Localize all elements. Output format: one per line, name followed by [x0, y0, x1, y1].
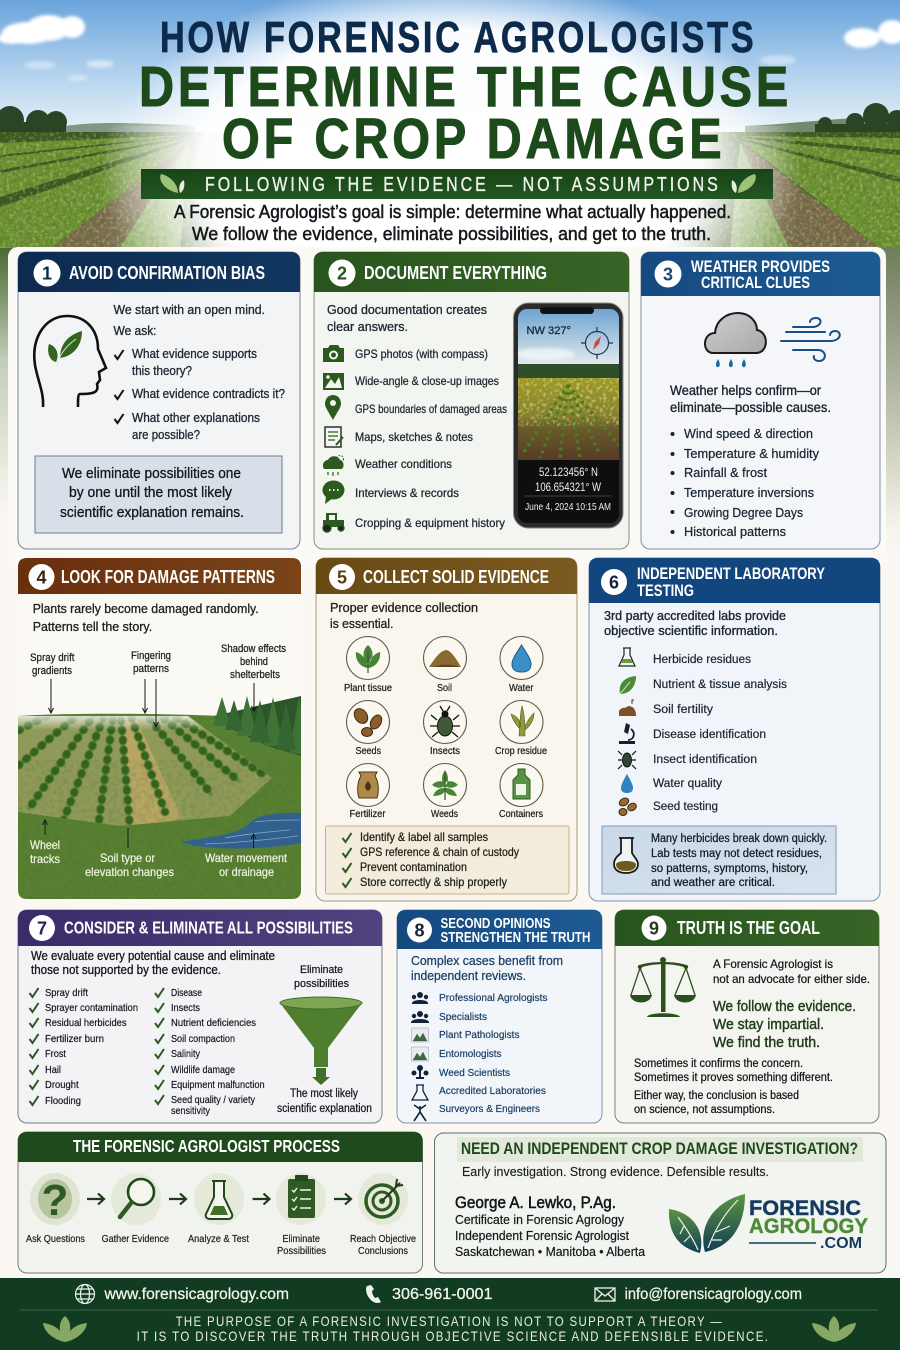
list: weather factors: Rainfall & frost — [684, 465, 767, 480]
text: we evaluate — [31, 949, 275, 977]
checklist: possibilities column 1: Residual herbicides — [45, 1017, 126, 1029]
number badge 1: 1 — [42, 264, 52, 284]
item: GPS photos — [323, 345, 488, 362]
item: herbicide residues: Herbicide residues — [653, 654, 751, 666]
list: reviewers: Weed Scientists — [439, 1067, 510, 1079]
contact details: Certificate in Forensic Agrology — [455, 1213, 625, 1227]
item: GPS boundaries: GPS boundaries of damaged areas — [355, 402, 507, 416]
checklist: possibilities column 2: Equipment malfunction — [171, 1079, 265, 1091]
item: wide-angle images — [323, 373, 499, 390]
text: follow the evidence: We follow the evidence. — [713, 999, 856, 1015]
icon: weeds — [424, 764, 466, 820]
panel: call to action and contact — [434, 1133, 886, 1273]
contact details: Saskatchewan • Manitoba • Alberta — [455, 1245, 645, 1259]
checklist: possibilities column 2: Wildlife damage — [171, 1064, 235, 1076]
icon: wind — [781, 318, 840, 361]
panel 9: truth is the goal — [615, 910, 879, 1123]
text: open mind questions: What evidence supports — [132, 346, 257, 361]
icon: flask — [614, 838, 638, 873]
contact details: Independent Forensic Agrologist — [455, 1229, 629, 1243]
checklist: sample handling: Store correctly & ship properly — [360, 875, 507, 889]
item: interviews: Interviews & records — [355, 486, 459, 500]
panel 4: look for damage patterns — [0, 558, 309, 899]
list: reviewers: Surveyors & Engineers — [439, 1103, 540, 1115]
icon: specialists — [411, 1011, 429, 1023]
label: spray drift gradients: gradients — [32, 665, 72, 677]
label: spray drift gradients — [30, 652, 74, 677]
text: weather helps — [670, 383, 831, 415]
heading: AVOID CONFIRMATION BIAS — [69, 263, 265, 283]
heading: DOCUMENT EVERYTHING — [364, 263, 547, 283]
callout: herbicides break down: and weather are critical. — [651, 877, 775, 889]
checklist: possibilities column 1: Drought — [45, 1079, 79, 1091]
labels: bottom of field: tracks — [30, 852, 60, 866]
item: water quality: Water quality — [653, 778, 722, 790]
funnel diagram: possibilities — [294, 978, 349, 990]
icon: insects — [424, 700, 466, 757]
arrow — [253, 1194, 270, 1204]
icon: head with leaf — [34, 316, 106, 407]
checklist: possibilities column 1: Sprayer contamination — [45, 1002, 138, 1014]
text: conclusion: Sometimes it confirms the concern. — [634, 1058, 803, 1070]
text: we evaluate: those not supported by the evidence. — [31, 963, 221, 977]
panel 3: weather provides critical clues — [641, 252, 880, 549]
number badge 5: 5 — [337, 568, 347, 588]
closing statement — [137, 1313, 768, 1344]
text: not an advocate — [713, 957, 870, 986]
checklist: possibilities column 1: Spray drift — [45, 987, 88, 999]
item: disease identification — [619, 723, 766, 744]
number badge 9: 9 — [649, 918, 659, 938]
labels: bottom of field — [30, 838, 288, 879]
text: complex cases — [411, 954, 563, 983]
number badge 3 — [654, 260, 682, 288]
heading: INDEPENDENT LABORATORY — [637, 565, 825, 583]
callout: herbicides break down: so patterns, symptoms, history, — [651, 863, 808, 875]
checklist: possibilities column 1 — [30, 987, 138, 1107]
arrows: bottom callouts — [42, 820, 256, 848]
text: plants rarely — [33, 601, 259, 634]
list: reviewers: Professional Agrologists — [439, 992, 548, 1004]
panel 6: independent laboratory testing — [589, 558, 880, 901]
label: fingering patterns: Fingering — [131, 650, 171, 662]
logo: forensic agrology — [669, 1194, 868, 1253]
step: ask questions: Ask Questions — [26, 1233, 85, 1245]
heading: CONSIDER & ELIMINATE ALL POSSIBILITIES — [64, 918, 353, 938]
text: follow the evidence: We find the truth. — [713, 1035, 820, 1051]
item: seed testing: Seed testing — [653, 801, 718, 813]
heading: CRITICAL CLUES — [701, 274, 810, 292]
number badge 8 — [407, 918, 432, 942]
heading: SECOND OPINIONS — [440, 916, 551, 932]
text: open mind questions: What other explanations — [132, 410, 260, 425]
panel 7: consider and eliminate all possibilities — [18, 910, 382, 1123]
number badge 4: 4 — [36, 568, 47, 588]
text: follow the evidence — [713, 999, 856, 1051]
item: seed testing — [618, 796, 718, 816]
number badge 6: 6 — [609, 572, 619, 592]
heading: LOOK FOR DAMAGE PATTERNS — [61, 567, 275, 587]
GPS coordinates: 52.123456° N — [539, 467, 598, 479]
labels: bottom of field: Water movement — [205, 851, 288, 865]
funnel diagram: The most likely — [290, 1088, 358, 1100]
text: weather helps: Weather helps confirm—or — [670, 383, 821, 398]
checklist: possibilities column 1: Flooding — [45, 1095, 81, 1107]
GPS coordinates — [524, 467, 612, 513]
labels: bottom of field: elevation changes — [85, 865, 174, 879]
callout: eliminate possibilities: We eliminate possibilities one — [62, 466, 241, 482]
list: reviewers: Specialists — [439, 1011, 487, 1023]
step: gather evidence: Gather Evidence — [102, 1233, 169, 1245]
list: reviewers: Entomologists — [439, 1048, 502, 1060]
logo: forensic agrology: FORENSIC — [749, 1197, 861, 1220]
number badge 5 — [329, 564, 355, 590]
text: complex cases: independent reviews. — [411, 969, 526, 983]
icon: fertilizer: Fertilizer — [350, 808, 386, 820]
icon: compass — [581, 327, 613, 359]
list: weather factors: Temperature & humidity — [684, 446, 819, 461]
heading: STRENGTHEN THE TRUTH — [440, 930, 590, 946]
text: follow the evidence: We stay impartial. — [713, 1017, 824, 1033]
step: reach objective conclusions — [350, 1173, 416, 1257]
item: wide-angle images: Wide-angle & close-up images — [355, 374, 499, 388]
funnel diagram — [277, 964, 372, 1115]
contact details: George A. Lewko, P.Ag. — [455, 1193, 616, 1212]
heading: TESTING — [637, 582, 694, 600]
list: weather factors — [670, 426, 819, 539]
step: reach objective conclusions: Conclusions — [358, 1245, 408, 1257]
number badge 3: 3 — [663, 264, 673, 284]
label: spray drift gradients: Spray drift — [30, 652, 74, 664]
icon: soil — [424, 636, 466, 694]
icon: rain cloud — [705, 313, 766, 367]
text: weather helps: eliminate—possible causes. — [670, 400, 831, 415]
icon: weed scientists — [412, 1065, 428, 1079]
text: conclusion — [634, 1058, 833, 1116]
illustration: phone with GPS photo — [514, 303, 623, 528]
checklist: possibilities column 2: Nutrient deficiencies — [171, 1017, 256, 1029]
checklist: sample handling: GPS reference & chain of custody — [360, 845, 519, 859]
checklist: possibilities column 1: Hail — [45, 1064, 61, 1076]
white backing panel — [8, 247, 886, 567]
icon: seeds — [346, 700, 390, 757]
item: cropping history: Cropping & equipment history — [355, 516, 505, 530]
number badge 9 — [642, 916, 666, 940]
heading — [637, 565, 825, 600]
panel 8: second opinions — [397, 910, 602, 1123]
text: 3rd party labs: 3rd party accredited labs provide — [604, 609, 786, 623]
text: open mind questions: We ask: — [114, 323, 156, 338]
text: open mind questions: this theory? — [132, 363, 192, 378]
heading — [440, 916, 590, 946]
item: insect identification — [618, 751, 757, 769]
list: weather factors: Growing Degree Days — [684, 505, 803, 520]
icon: globe — [76, 1284, 94, 1304]
number badge 2: 2 — [337, 264, 347, 284]
heading: THE FORENSIC AGROLOGIST PROCESS — [73, 1136, 340, 1156]
panel 5: collect solid evidence — [316, 558, 577, 901]
item: nutrient analysis: Nutrient & tissue analysis — [653, 679, 787, 691]
subtitle banner: FOLLOWING THE EVIDENCE — NOT ASSUMPTIONS — [205, 173, 718, 195]
item: weather conditions — [323, 456, 452, 476]
list: reviewers: Accredited Laboratories — [439, 1085, 546, 1097]
title — [139, 13, 788, 171]
icon: telephone — [366, 1285, 381, 1303]
icon: balance scale — [630, 957, 696, 1017]
callout: herbicides break down: Many herbicides break down quickly. — [651, 833, 827, 845]
text: proper evidence: Proper evidence collection — [330, 600, 478, 615]
GPS coordinates: June 4, 2024 10:15 AM — [525, 501, 611, 513]
item: weather conditions: Weather conditions — [355, 457, 452, 471]
checklist: possibilities column 2: Soil compaction — [171, 1033, 235, 1045]
logo: forensic agrology: AGROLOGY — [749, 1215, 868, 1238]
logo: forensic agrology: .COM — [820, 1235, 862, 1252]
text: open mind questions: What evidence contradicts it? — [132, 386, 285, 401]
icon: plant tissue — [344, 636, 392, 694]
checklist: possibilities column 1: Fertilizer burn — [45, 1033, 104, 1045]
heading: TRUTH IS THE GOAL — [677, 918, 820, 938]
item: maps and notes: Maps, sketches & notes — [355, 430, 473, 444]
arrow — [334, 1194, 351, 1204]
number badge 1 — [34, 260, 60, 286]
side field fade — [0, 248, 900, 568]
panel 1: avoid confirmation bias — [18, 252, 300, 549]
checklist: sample handling — [326, 826, 569, 894]
step: eliminate possibilities: Possibilities — [277, 1245, 326, 1257]
arrows: top callouts — [48, 679, 256, 727]
intro text: We follow the evidence, eliminate possibilities, and get to the truth. — [192, 224, 711, 244]
text: plants rarely: Plants rarely become damaged randomly. — [33, 601, 259, 616]
icon: envelope — [595, 1288, 615, 1301]
checklist: possibilities column 2 — [155, 987, 265, 1117]
icon: water — [500, 636, 543, 694]
funnel diagram: scientific explanation — [277, 1103, 372, 1115]
icon: insects: Insects — [430, 745, 460, 757]
title: HOW FORENSIC AGROLOGISTS — [160, 13, 754, 62]
panel: forensic agrologist process — [18, 1132, 422, 1273]
hero image: sky, clouds and crop field — [0, 0, 900, 365]
checklist: possibilities column 2: Salinity — [171, 1048, 201, 1060]
icon: seeds: Seeds — [356, 745, 381, 757]
icon: containers: Containers — [499, 808, 543, 820]
list: weather factors: Temperature inversions — [684, 485, 814, 500]
labels: bottom of field: Soil type or — [100, 851, 155, 865]
item: disease identification: Disease identification — [653, 729, 766, 741]
funnel diagram: Eliminate — [300, 964, 343, 976]
icon: plant tissue: Plant tissue — [344, 682, 392, 694]
text: conclusion: Either way, the conclusion is based — [634, 1090, 799, 1102]
text: complex cases: Complex cases benefit from — [411, 954, 563, 968]
callout: herbicides break down — [602, 826, 836, 894]
label: fingering patterns — [131, 650, 171, 675]
list: reviewers — [411, 992, 548, 1121]
item: cropping history — [323, 513, 505, 532]
text: good documentation: clear answers. — [327, 319, 408, 334]
checklist: possibilities column 2: sensitivity — [171, 1105, 211, 1117]
callout: eliminate possibilities — [35, 456, 282, 533]
icon: containers — [499, 764, 543, 820]
checklist: possibilities column 2: Seed quality / variety — [171, 1094, 256, 1106]
number badge 7 — [29, 915, 55, 941]
icon: surveyors and engineers — [414, 1105, 426, 1121]
text: proper evidence — [330, 600, 478, 631]
step: ask questions: ? — [42, 1176, 68, 1225]
step: reach objective conclusions: Reach Objective — [350, 1233, 416, 1245]
arrow — [87, 1194, 104, 1204]
item: soil fertility: Soil fertility — [653, 704, 713, 716]
icon: funnel — [280, 997, 362, 1085]
icon: fertilizer — [346, 764, 390, 820]
item: soil fertility — [619, 700, 713, 716]
number badge 4 — [28, 564, 54, 590]
number badge 7: 7 — [37, 918, 47, 938]
heading: WEATHER PROVIDES — [691, 258, 830, 276]
step: analyze and test — [188, 1173, 249, 1245]
heading — [691, 258, 830, 292]
list: reviewers: Plant Pathologists — [439, 1029, 520, 1041]
checklist: sample handling: Prevent contamination — [360, 860, 467, 874]
checklist: possibilities column 2: Disease — [171, 987, 202, 999]
list: weather factors: Historical patterns — [684, 524, 786, 539]
callout: herbicides break down: Lab tests may not detect residues, — [651, 848, 822, 860]
icon: crop residue: Crop residue — [495, 745, 547, 757]
text: 3rd party labs — [604, 609, 786, 638]
checklist: possibilities column 1: Frost — [45, 1048, 66, 1060]
item: nutrient analysis — [620, 676, 787, 694]
website: www.forensicagrology.com — [103, 1286, 289, 1303]
icon: crop residue — [495, 700, 547, 757]
GPS coordinates: 106.654321° W — [535, 482, 601, 494]
item: maps and notes — [325, 427, 473, 447]
number badge 6 — [601, 569, 627, 595]
title: DETERMINE THE CAUSE — [139, 56, 788, 119]
item: GPS photos: GPS photos (with compass) — [355, 347, 488, 361]
icon: professional agrologists — [412, 992, 428, 1004]
icon: entomologists — [412, 1047, 428, 1061]
icon: weeds: Weeds — [431, 808, 458, 820]
item: GPS boundaries — [325, 395, 507, 420]
icon: banner leaf left — [160, 174, 184, 193]
text: open mind questions: are possible? — [132, 427, 200, 442]
checklist: possibilities column 2: Insects — [171, 1002, 200, 1014]
step: eliminate possibilities: Eliminate — [282, 1233, 320, 1245]
closing statement: IT IS TO DISCOVER THE TRUTH THROUGH OBJECTIVE SCIENCE AND DEFENSIBLE EVIDENCE. — [137, 1328, 768, 1344]
labels: bottom of field: or drainage — [219, 865, 274, 879]
illustration: field damage patterns — [18, 696, 301, 899]
heading: COLLECT SOLID EVIDENCE — [363, 567, 549, 587]
text: conclusion: on science, not assumptions. — [634, 1104, 775, 1116]
text: good documentation — [327, 302, 487, 334]
email: info@forensicagrology.com — [625, 1286, 802, 1303]
icon: banner leaf right — [732, 174, 756, 193]
item: herbicide residues — [619, 648, 751, 666]
text: 3rd party labs: objective scientific information. — [604, 624, 778, 638]
labels: bottom of field: Wheel — [30, 838, 60, 852]
label: fingering patterns: patterns — [133, 663, 169, 675]
intro text — [174, 202, 731, 244]
icon: soil: Soil — [437, 682, 452, 694]
text: conclusion: Sometimes it proves something different. — [634, 1072, 833, 1084]
icon: water: Water — [509, 682, 534, 694]
number badge 2 — [328, 260, 356, 286]
text: not an advocate: A Forensic Agrologist is — [713, 957, 833, 971]
item: insect identification: Insect identification — [653, 754, 757, 766]
contact details — [455, 1193, 645, 1259]
text: proper evidence: is essential. — [330, 616, 394, 631]
label: shadow effects: shelterbelts — [230, 669, 280, 681]
checklist: sample handling: Identify & label all samples — [360, 830, 488, 844]
compass readout: NW 327° — [526, 325, 571, 337]
text: good documentation: Good documentation creates — [327, 302, 487, 317]
title: OF CROP DAMAGE — [222, 108, 722, 171]
icon: footer leaves right — [812, 1316, 856, 1342]
closing statement: THE PURPOSE OF A FORENSIC INVESTIGATION IS NOT TO SUPPORT A THEORY — — [176, 1313, 722, 1329]
callout: eliminate possibilities: scientific explanation remains. — [60, 505, 244, 521]
text: we evaluate: We evaluate every potential cause and eliminate — [31, 949, 275, 963]
step: ask questions — [26, 1173, 85, 1245]
label: shadow effects: behind — [240, 656, 268, 668]
tagline: Early investigation. Strong evidence. Defensible results. — [462, 1164, 769, 1179]
label: shadow effects: Shadow effects — [221, 643, 286, 655]
icon: footer leaves left — [43, 1316, 87, 1342]
text: open mind questions: We start with an open mind. — [114, 302, 265, 317]
step: analyze and test: Analyze & Test — [188, 1233, 249, 1245]
panel 2: document everything — [314, 252, 629, 549]
intro text: A Forensic Agrologist’s goal is simple: determine what actually happened. — [174, 202, 731, 222]
label: shadow effects — [221, 643, 286, 681]
phone: 306-961-0001 — [392, 1286, 493, 1303]
callout: eliminate possibilities: by one until the most likely — [69, 485, 233, 501]
icon: accredited laboratories — [412, 1085, 428, 1100]
icon: plant pathologists — [412, 1028, 428, 1042]
step: eliminate possibilities — [276, 1173, 326, 1257]
arrow — [169, 1194, 186, 1204]
step: gather evidence — [102, 1173, 169, 1245]
list: weather factors: Wind speed & direction — [684, 426, 813, 441]
subtitle banner — [141, 169, 773, 199]
number badge 8: 8 — [414, 920, 425, 940]
footer bar — [0, 1278, 900, 1350]
text: open mind questions — [114, 302, 285, 442]
text: plants rarely: Patterns tell the story. — [33, 619, 152, 634]
item: interviews — [322, 480, 459, 504]
text: not an advocate: not an advocate for either side. — [713, 972, 870, 986]
item: water quality — [621, 774, 722, 793]
